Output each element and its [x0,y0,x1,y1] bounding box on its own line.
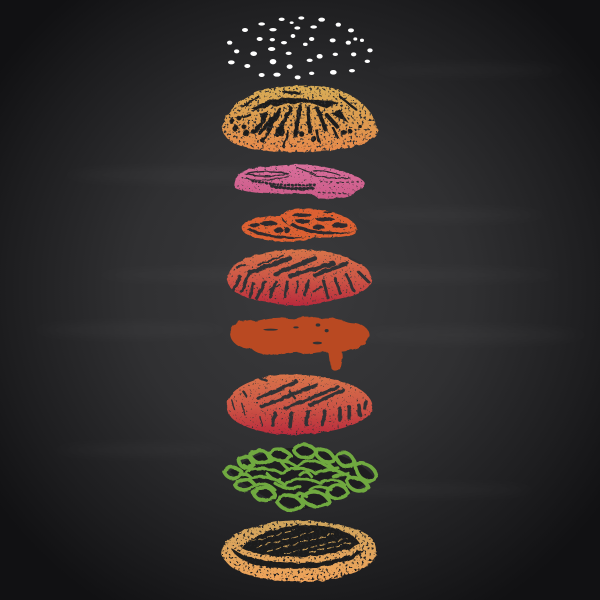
ketchup smear [231,317,369,371]
lower beef patty [227,374,373,435]
sesame seeds [227,16,373,79]
bottom bun [222,521,377,582]
upper beef patty [227,250,372,305]
top bun [223,86,378,152]
red onion slices [234,164,365,199]
lettuce leaf [224,445,377,510]
tomato slices [242,209,357,242]
